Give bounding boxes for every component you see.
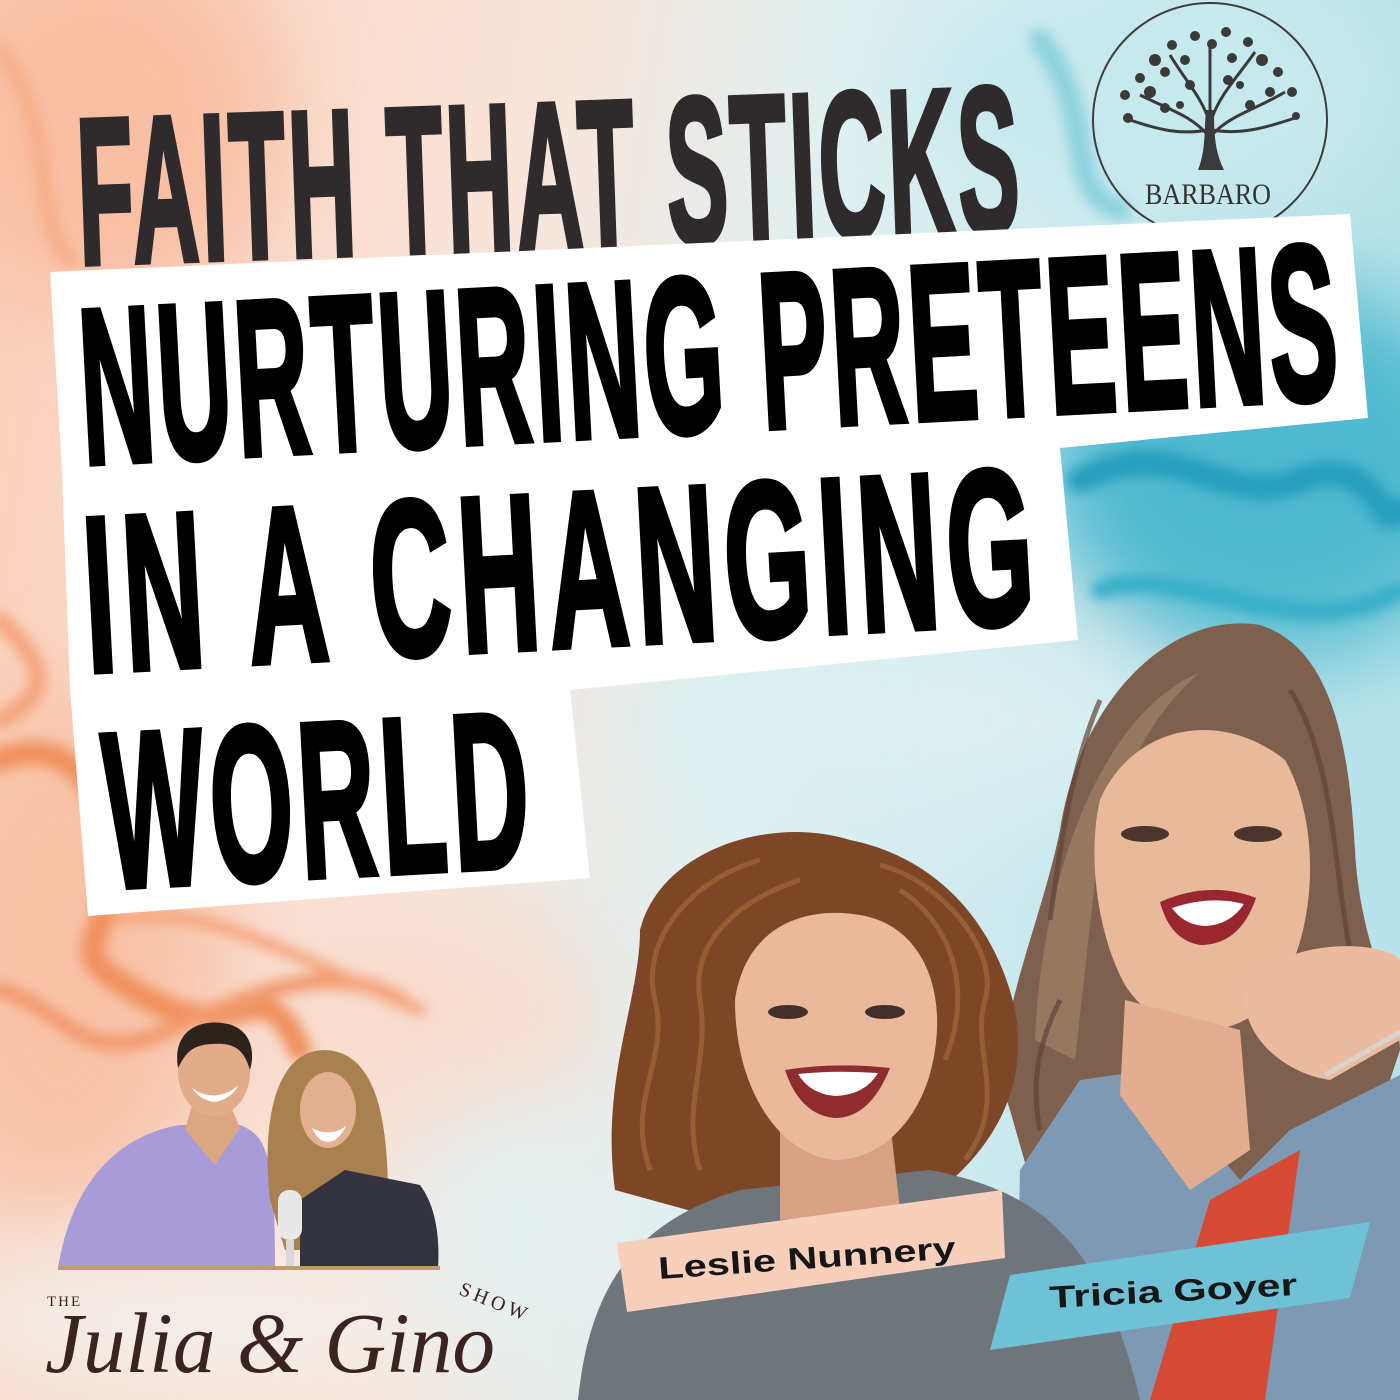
logo: Barbaro 360 bbox=[1093, 3, 1327, 237]
logo text: BARBARO bbox=[1145, 178, 1271, 211]
name tag: Leslie Nunnery: Leslie Nunnery bbox=[657, 1230, 958, 1286]
host Gino bbox=[58, 1023, 275, 1268]
eyes bbox=[768, 1005, 808, 1019]
show logo: The: THE bbox=[47, 1294, 82, 1310]
white title backing bbox=[50, 214, 1368, 916]
smile bbox=[785, 1065, 890, 1118]
headline: Nurturing Preteens in a Changing World bbox=[74, 198, 1343, 935]
neck bbox=[780, 1120, 900, 1220]
smile bbox=[1160, 890, 1256, 945]
jacket bbox=[1015, 1070, 1400, 1400]
guest photo: Tricia Goyer bbox=[1004, 623, 1400, 1400]
headline line 1: NURTURING PRETEENS bbox=[74, 198, 1343, 511]
table edge bbox=[58, 1266, 440, 1270]
headline: Faith That Sticks: FAITH THAT STICKS bbox=[73, 45, 1023, 309]
headline line 2: IN A CHANGING bbox=[78, 423, 1039, 720]
icon: tree bbox=[1120, 27, 1300, 170]
hair bbox=[1004, 623, 1400, 1200]
show logo: script name: Julia & Gino bbox=[45, 1295, 495, 1391]
face bbox=[735, 913, 937, 1160]
show logo bbox=[45, 1278, 534, 1391]
hair bbox=[612, 832, 1018, 1230]
hand and arm bbox=[1245, 946, 1400, 1080]
guest photo: Leslie Nunnery bbox=[578, 832, 1140, 1400]
sweater bbox=[578, 1170, 1140, 1400]
name tag: Leslie Nunnery bbox=[617, 1190, 1005, 1312]
eyes bbox=[1121, 826, 1169, 842]
face bbox=[1094, 730, 1310, 1030]
bracelet bbox=[1325, 1032, 1400, 1075]
show logo: Show: SHOW bbox=[456, 1278, 534, 1327]
microphone bbox=[278, 1190, 302, 1268]
name tag: Tricia Goyer bbox=[990, 1222, 1370, 1350]
host Julia bbox=[268, 1050, 438, 1268]
name tag: Tricia Goyer: Tricia Goyer bbox=[1049, 1267, 1298, 1315]
hosts photo bbox=[58, 1023, 440, 1270]
headline line 3: WORLD bbox=[97, 665, 535, 935]
